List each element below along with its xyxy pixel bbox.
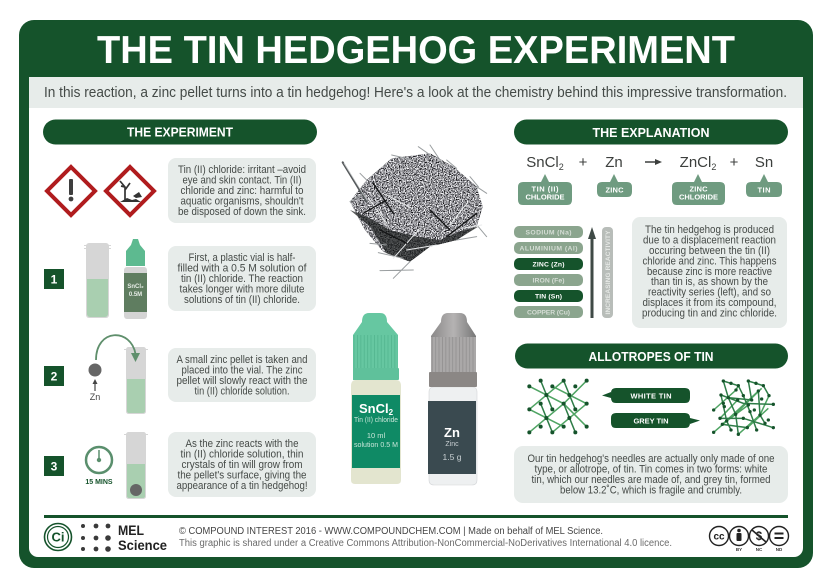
label: increasing reactivity: INCREASING REACTIVITY	[605, 230, 612, 314]
step 1 number	[44, 269, 64, 289]
icon: hazard environment	[106, 167, 154, 215]
logo: compound interest: Ci	[52, 530, 64, 544]
text: step 2	[168, 348, 316, 402]
panel: allotropes of tin	[514, 344, 788, 503]
photo: tin chloride bottle: SnCl	[359, 401, 389, 416]
text: step 2: pellet will slowly react with the	[176, 375, 308, 387]
text: step 3: tin (II) chloride solution, thin	[180, 448, 304, 460]
diagram: white tin lattice	[527, 379, 589, 434]
tag: tin (II) chloride: TIN (II)	[532, 184, 559, 194]
photo: zinc bottle: 1.5 g	[443, 452, 462, 462]
icon: dropper bottle	[124, 239, 147, 319]
step 3 number: 3	[51, 460, 58, 474]
chemical equation: +	[730, 154, 739, 171]
intro band	[29, 77, 803, 108]
text: displacement explanation	[632, 217, 787, 328]
text: displacement explanation: than tin is, as shown by the	[651, 276, 768, 288]
photo: zinc bottle: Zinc	[445, 441, 459, 448]
diagram: grey tin lattice	[712, 379, 775, 436]
text: displacement explanation: reactivity series (left), and so	[648, 287, 771, 299]
credit text	[179, 526, 672, 549]
chemical equation: ZnCl	[680, 154, 711, 171]
heading: the explanation: THE EXPLANATION	[592, 125, 710, 140]
reactivity series list: COPPER (Cu)	[527, 310, 570, 316]
icons: creative commons licence: $	[756, 531, 763, 543]
text: allotropes explanation: type, or allotrope, of tin. Tin comes in two forms: white	[534, 464, 768, 476]
photo: tin hedgehog	[343, 145, 487, 278]
logo: MEL Science: Science	[118, 537, 167, 553]
icon: timer 15 mins	[85, 447, 113, 486]
text: step 1: filled with a 0.5 M solution of	[178, 262, 307, 274]
label: white tin	[602, 388, 690, 403]
text: displacement explanation: because zinc is more reactive	[647, 266, 772, 278]
panel: the experiment	[43, 120, 317, 499]
heading: the explanation	[514, 120, 788, 144]
text: step 2: tin (II) chloride solution.	[194, 386, 290, 398]
reactivity series list: SODIUM (Na)	[526, 230, 572, 236]
text: step 3: As the zinc reacts with the	[186, 438, 298, 450]
chemical equation	[526, 154, 773, 172]
text: step 3: the pellet's surface, giving the	[178, 470, 306, 482]
text: hazard warning: eye and skin contact. Tin (II)	[182, 174, 302, 186]
tag: zinc	[597, 174, 632, 197]
photo: tin chloride bottle: solution 0.5 M	[354, 440, 398, 449]
text: displacement explanation: producing tin and zinc chloride.	[642, 307, 777, 319]
icon: vial half filled	[84, 243, 111, 318]
title: THE TIN HEDGEHOG EXPERIMENT	[97, 29, 735, 72]
tag: zinc chloride: ZINC	[690, 184, 708, 194]
text: allotropes explanation: Our tin hedgehog's needles are actually only made of one	[528, 453, 774, 465]
reactivity series list: ALUMINIUM (Al)	[520, 246, 578, 252]
logo: MEL Science	[81, 522, 167, 553]
reactivity series list: TIN (Sn)	[535, 294, 562, 300]
footer	[44, 515, 788, 553]
icon: dropper bottle: SnCl₂	[127, 284, 144, 290]
chemical equation: 2	[559, 162, 564, 172]
icons: creative commons licence: NC	[756, 547, 763, 552]
icon: timer 15 mins: 15 MINS	[85, 479, 113, 486]
text: allotropes explanation: below 13.2˚C, which is fragile and crumbly.	[560, 484, 742, 496]
icons: creative commons licence: cc	[713, 532, 725, 542]
icons: creative commons licence	[710, 526, 788, 552]
step 1 number: 1	[51, 272, 58, 286]
heading: allotropes of tin: ALLOTROPES OF TIN	[588, 349, 714, 364]
reactivity series list	[514, 226, 583, 318]
text: hazard warning	[168, 158, 316, 223]
icon: zinc pellet: Zn	[90, 392, 100, 402]
photo: tin chloride bottle	[351, 313, 401, 484]
chemical equation: Zn	[605, 154, 623, 171]
arrow: pellet into vial	[96, 335, 140, 362]
heading: allotropes of tin	[515, 344, 788, 368]
label: grey tin: GREY TIN	[634, 416, 668, 426]
text: displacement explanation: The tin hedgehog is produced	[645, 224, 774, 236]
text: displacement explanation: displaces it from its compound,	[642, 297, 776, 309]
text: displacement explanation: occuring between the tin (II)	[649, 245, 770, 257]
label: increasing reactivity	[602, 227, 613, 318]
icon: vial with solution	[124, 347, 148, 414]
text: step 3	[168, 432, 316, 497]
text: step 2: placed into the vial. The zinc	[182, 364, 303, 376]
text: step 1: takes longer with more dilute	[180, 284, 304, 296]
icon: vial with pellet	[124, 432, 148, 499]
reactivity series list: IRON (Fe)	[532, 278, 564, 284]
tag: tin (II) chloride	[518, 174, 572, 205]
text: step 1: First, a plastic vial is half-	[188, 252, 296, 264]
icon: hazard irritant	[47, 167, 95, 215]
photo: zinc bottle: Zn	[444, 425, 460, 440]
credit text: This graphic is shared under a Creative Commons Attribution-NonCommercial-NoDerivatives International 4.0 licence.	[179, 538, 672, 549]
text: step 1: tin (II) chloride. The reaction	[181, 273, 303, 285]
tag: tin: TIN	[758, 186, 770, 194]
text: hazard warning: aquatic organisms, shouldn't	[180, 196, 304, 208]
label: grey tin	[611, 413, 700, 428]
text: step 2: A small zinc pellet is taken and	[176, 354, 308, 366]
tag: tin (II) chloride: CHLORIDE	[526, 192, 564, 202]
heading: the experiment: THE EXPERIMENT	[127, 124, 233, 140]
text: hazard warning: Tin (II) chloride: irritant –avoid	[178, 164, 306, 176]
photo: tin chloride bottle: 10 ml	[367, 431, 386, 440]
step 2 number: 2	[51, 370, 58, 384]
text: allotropes explanation	[514, 446, 788, 503]
text: hazard warning: chloride and zinc: harmful to	[180, 185, 304, 197]
white content panel	[29, 77, 803, 557]
credit text: © COMPOUND INTEREST 2016 - WWW.COMPOUNDCHEM.COM | Made on behalf of MEL Science.	[179, 526, 603, 537]
text: step 3: appearance of a tin hedgehog!	[176, 480, 308, 492]
photo: tin chloride bottle: 2	[389, 408, 394, 417]
intro band: In this reaction, a zinc pellet turns into a tin hedgehog! Here's a look at the chemistry behind this impressive transformation.	[44, 85, 787, 101]
step 2 number	[44, 366, 64, 386]
tag: tin	[746, 174, 782, 197]
reactivity series list: ZINC (Zn)	[532, 262, 564, 268]
logo: MEL Science: MEL	[118, 522, 144, 538]
icons: creative commons licence: ND	[776, 547, 783, 552]
text: step 1: solutions of tin (II) chloride.	[184, 294, 300, 306]
step 3 number	[44, 456, 64, 476]
logo: compound interest	[44, 524, 72, 550]
photo: zinc bottle	[428, 313, 477, 485]
icon: dropper bottle: 0.5M	[129, 292, 142, 298]
chemical equation: +	[579, 154, 588, 171]
icon: zinc pellet	[88, 364, 102, 402]
text: displacement explanation: chloride and zinc. This happens	[642, 255, 777, 267]
label: white tin: WHITE TIN	[630, 392, 672, 400]
tag: zinc chloride: CHLORIDE	[679, 192, 718, 202]
panel: the explanation	[514, 120, 788, 328]
chemical equation: SnCl	[526, 154, 559, 171]
arrow: reactivity direction	[588, 227, 596, 318]
tag: zinc: ZINC	[606, 186, 624, 194]
text: hazard warning: be disposed of down the sink.	[178, 206, 306, 218]
text: displacement explanation: due to a displacement reaction	[643, 234, 776, 246]
text: step 3: crystals of tin will grow from	[182, 459, 302, 471]
tag: zinc chloride	[672, 174, 725, 205]
text: allotropes explanation: tin, which our needles are made of, and grey tin, formed	[532, 474, 770, 486]
text: step 1	[168, 246, 316, 311]
chemical equation: Sn	[755, 154, 773, 171]
photo: tin chloride bottle: Tin (II) chloride	[354, 415, 398, 424]
chemical equation: 2	[711, 162, 716, 172]
heading: the experiment	[43, 120, 317, 144]
icons: creative commons licence: BY	[736, 547, 742, 552]
